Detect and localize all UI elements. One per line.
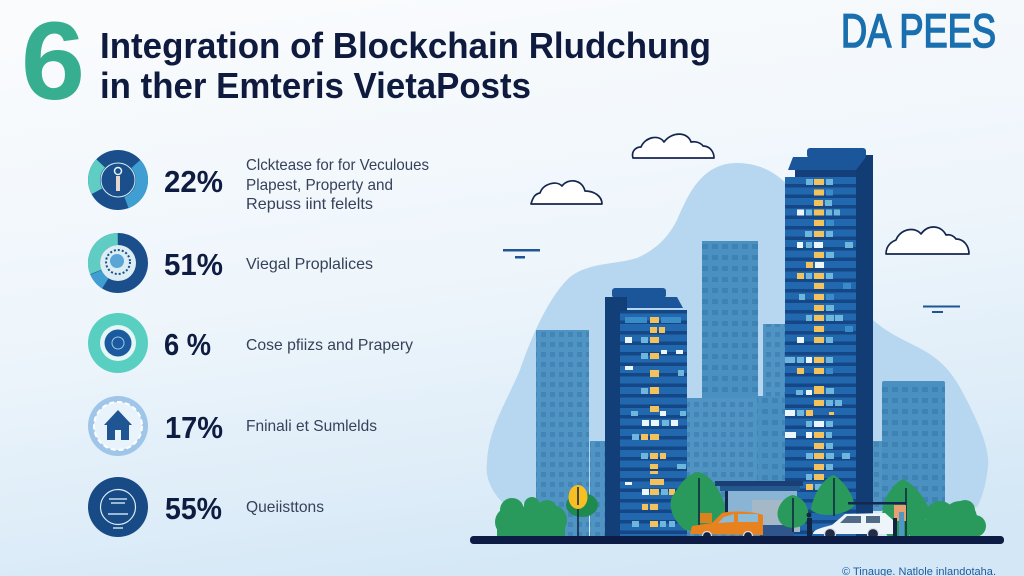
description: Cose pfiizs and Prapery bbox=[246, 337, 413, 354]
bushes: left bbox=[495, 497, 567, 537]
stat row: 55% bbox=[88, 477, 324, 537]
dash marks bbox=[503, 249, 960, 313]
tree bbox=[778, 495, 808, 532]
stat row: 17%: 17% bbox=[165, 410, 223, 445]
light tower: left bbox=[536, 330, 589, 537]
mid tower bbox=[605, 288, 687, 537]
icon: donut with gear globe bbox=[85, 230, 151, 296]
description: Plapest, Property and bbox=[246, 177, 393, 194]
cloud bbox=[886, 227, 969, 254]
description bbox=[246, 157, 429, 213]
tree: large bbox=[671, 472, 725, 532]
tree bbox=[811, 475, 854, 516]
title bbox=[100, 25, 711, 106]
description: Clcktease for for Veculoues bbox=[246, 157, 429, 174]
stat row: 55%: 55% bbox=[165, 491, 222, 526]
icon: dark seal bbox=[88, 477, 148, 537]
description: Fninali et Sumlelds bbox=[246, 418, 377, 435]
cloud bbox=[531, 181, 602, 204]
stat row: 6%: 6 % bbox=[164, 327, 211, 362]
cityscape illustration bbox=[470, 134, 1004, 544]
tree: yellow lollipop bbox=[566, 485, 598, 537]
stat row: 6% bbox=[88, 313, 413, 373]
icon: house badge bbox=[88, 396, 148, 456]
light tower: between bbox=[757, 396, 785, 537]
description: Queiisttons bbox=[246, 499, 324, 516]
stat row: 22%: 22% bbox=[164, 164, 223, 199]
backdrop blob bbox=[487, 163, 988, 507]
title: in ther Emteris VietaPosts bbox=[100, 65, 531, 106]
icon: donut with key bbox=[84, 146, 152, 214]
white car bbox=[813, 513, 895, 540]
title: Integration of Blockchain Rludchung bbox=[100, 25, 711, 66]
light tower: front bbox=[687, 398, 757, 537]
car shelter bbox=[848, 502, 906, 504]
person bbox=[806, 512, 812, 536]
tall tower bbox=[785, 148, 873, 537]
stat row: 22% bbox=[84, 146, 429, 214]
light tower: small left bbox=[590, 441, 605, 537]
stat row: 51%: 51% bbox=[164, 247, 223, 282]
light tower: behind bbox=[763, 324, 787, 537]
stat row: 51% bbox=[85, 230, 373, 296]
light tower: centre bbox=[702, 241, 758, 537]
ground line bbox=[470, 536, 1004, 544]
stat row: 17% bbox=[88, 396, 377, 456]
orange car bbox=[690, 512, 763, 540]
person with sign bbox=[893, 505, 906, 536]
bus shelter bbox=[715, 481, 803, 537]
cloud bbox=[633, 134, 714, 158]
tree and bushes: right bbox=[882, 479, 986, 537]
description: Viegal Proplalices bbox=[246, 256, 373, 273]
icon: teal ring with seal bbox=[88, 313, 148, 373]
number six: 6 bbox=[21, 0, 85, 123]
description: Repuss iint felelts bbox=[246, 196, 373, 213]
light tower: right bbox=[873, 381, 945, 511]
